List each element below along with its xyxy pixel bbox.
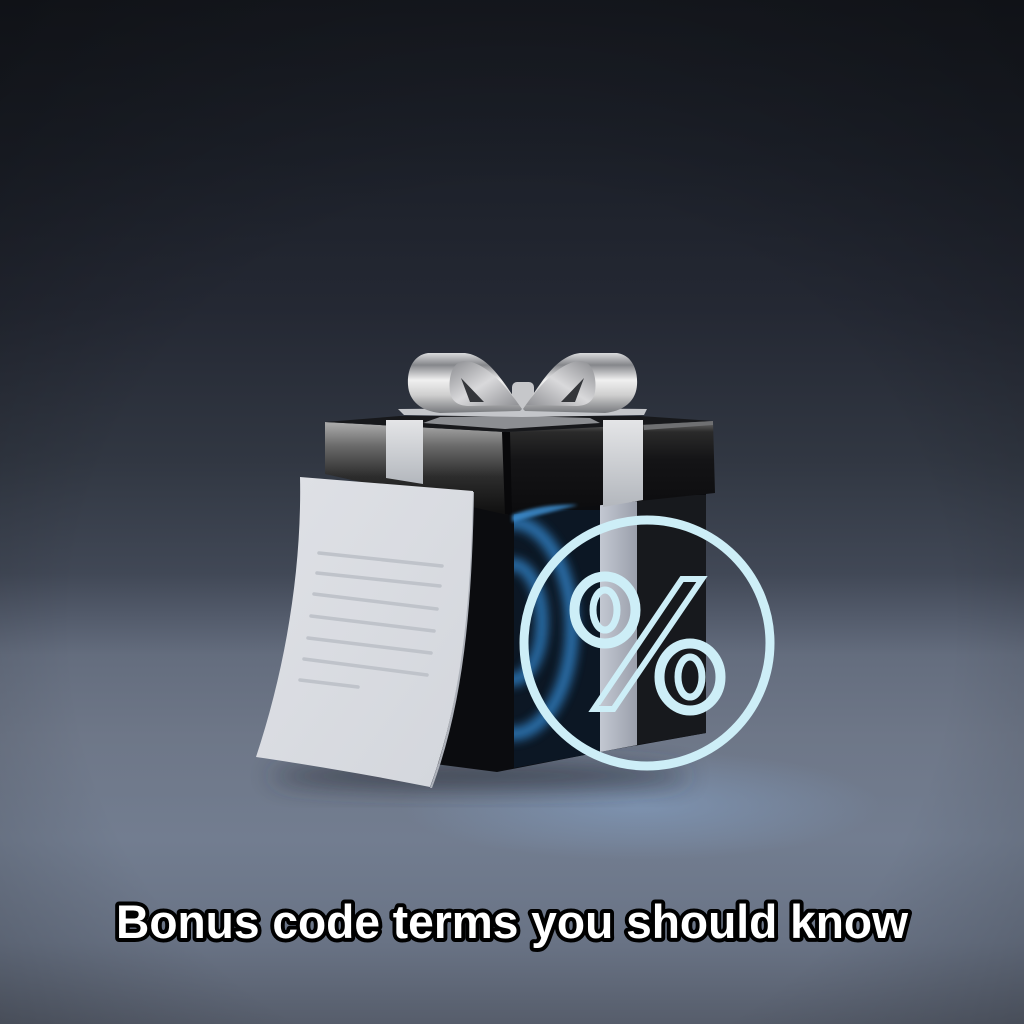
box body — [425, 480, 706, 772]
icon: document with text lines — [256, 477, 474, 788]
blue sliver under lid — [512, 505, 578, 522]
ribbon on box front — [600, 500, 637, 752]
percent symbol — [574, 576, 720, 710]
box lid — [325, 416, 715, 522]
blue glow rings on box face — [514, 514, 586, 747]
bow — [408, 353, 637, 413]
left bow loop — [408, 353, 522, 413]
title: Bonus code terms you should know — [116, 895, 908, 948]
ribbon on lid — [386, 408, 647, 507]
text lines on document — [300, 553, 442, 687]
floor glow and shadow — [270, 750, 880, 860]
icon: gift box — [325, 353, 715, 772]
icon: glowing percent badge — [524, 520, 770, 766]
bow knot — [512, 382, 534, 408]
right bow loop — [523, 353, 637, 413]
